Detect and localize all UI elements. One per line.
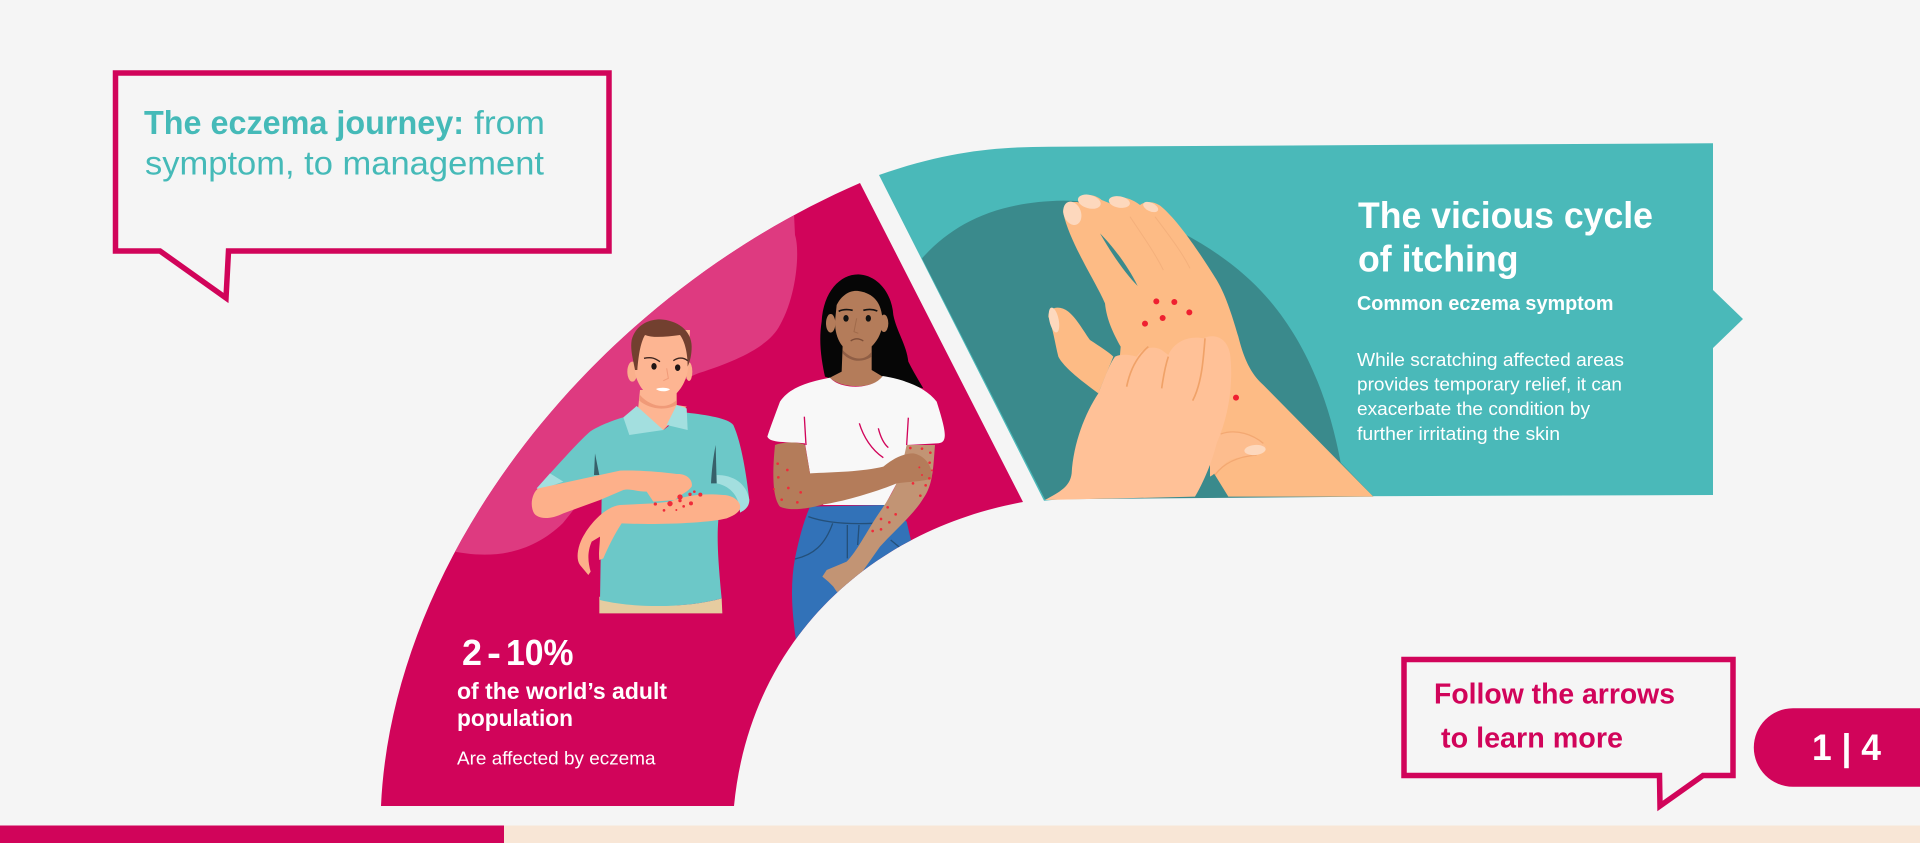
heading: the vicious cycle of itching: The vicious cycle — [1358, 194, 1653, 236]
illustration: man scratching arm — [532, 319, 749, 613]
callout text: Follow the arrows — [1434, 678, 1675, 710]
page indicator pill — [1754, 708, 1920, 787]
stat: 2-10%: 2 — [462, 632, 482, 673]
progress bar — [0, 826, 1920, 843]
callout: title speech bubble — [116, 73, 609, 298]
light blob background — [455, 215, 798, 555]
title text: from — [474, 105, 545, 142]
stat: 2-10%: 10% — [506, 632, 574, 673]
stat label: population — [457, 705, 573, 731]
body text: While scratching affected areas — [1357, 350, 1624, 370]
panel: magenta prevalence segment — [381, 150, 1023, 806]
panel: teal vicious cycle of itching — [879, 143, 1743, 501]
body text: exacerbate the condition by — [1357, 399, 1590, 419]
title text: symptom, to management — [145, 145, 545, 182]
page indicator pill: 1 | 4 — [1812, 727, 1881, 769]
illustration: woman with rash — [767, 274, 945, 645]
subheading: Common eczema symptom — [1357, 293, 1614, 315]
title text: The eczema journey: — [144, 105, 464, 142]
body text: provides temporary relief, it can — [1357, 375, 1622, 395]
callout text: to learn more — [1441, 722, 1623, 754]
body text: further irritating the skin — [1357, 424, 1560, 444]
heading: the vicious cycle of itching: of itching — [1358, 238, 1518, 280]
stat: 2-10%: - — [487, 632, 501, 673]
callout: follow the arrows speech bubble — [1404, 660, 1733, 806]
stat label: of the world’s adult — [457, 678, 667, 704]
stat note: Are affected by eczema — [457, 748, 657, 768]
illustration: scratching hands — [922, 192, 1373, 500]
